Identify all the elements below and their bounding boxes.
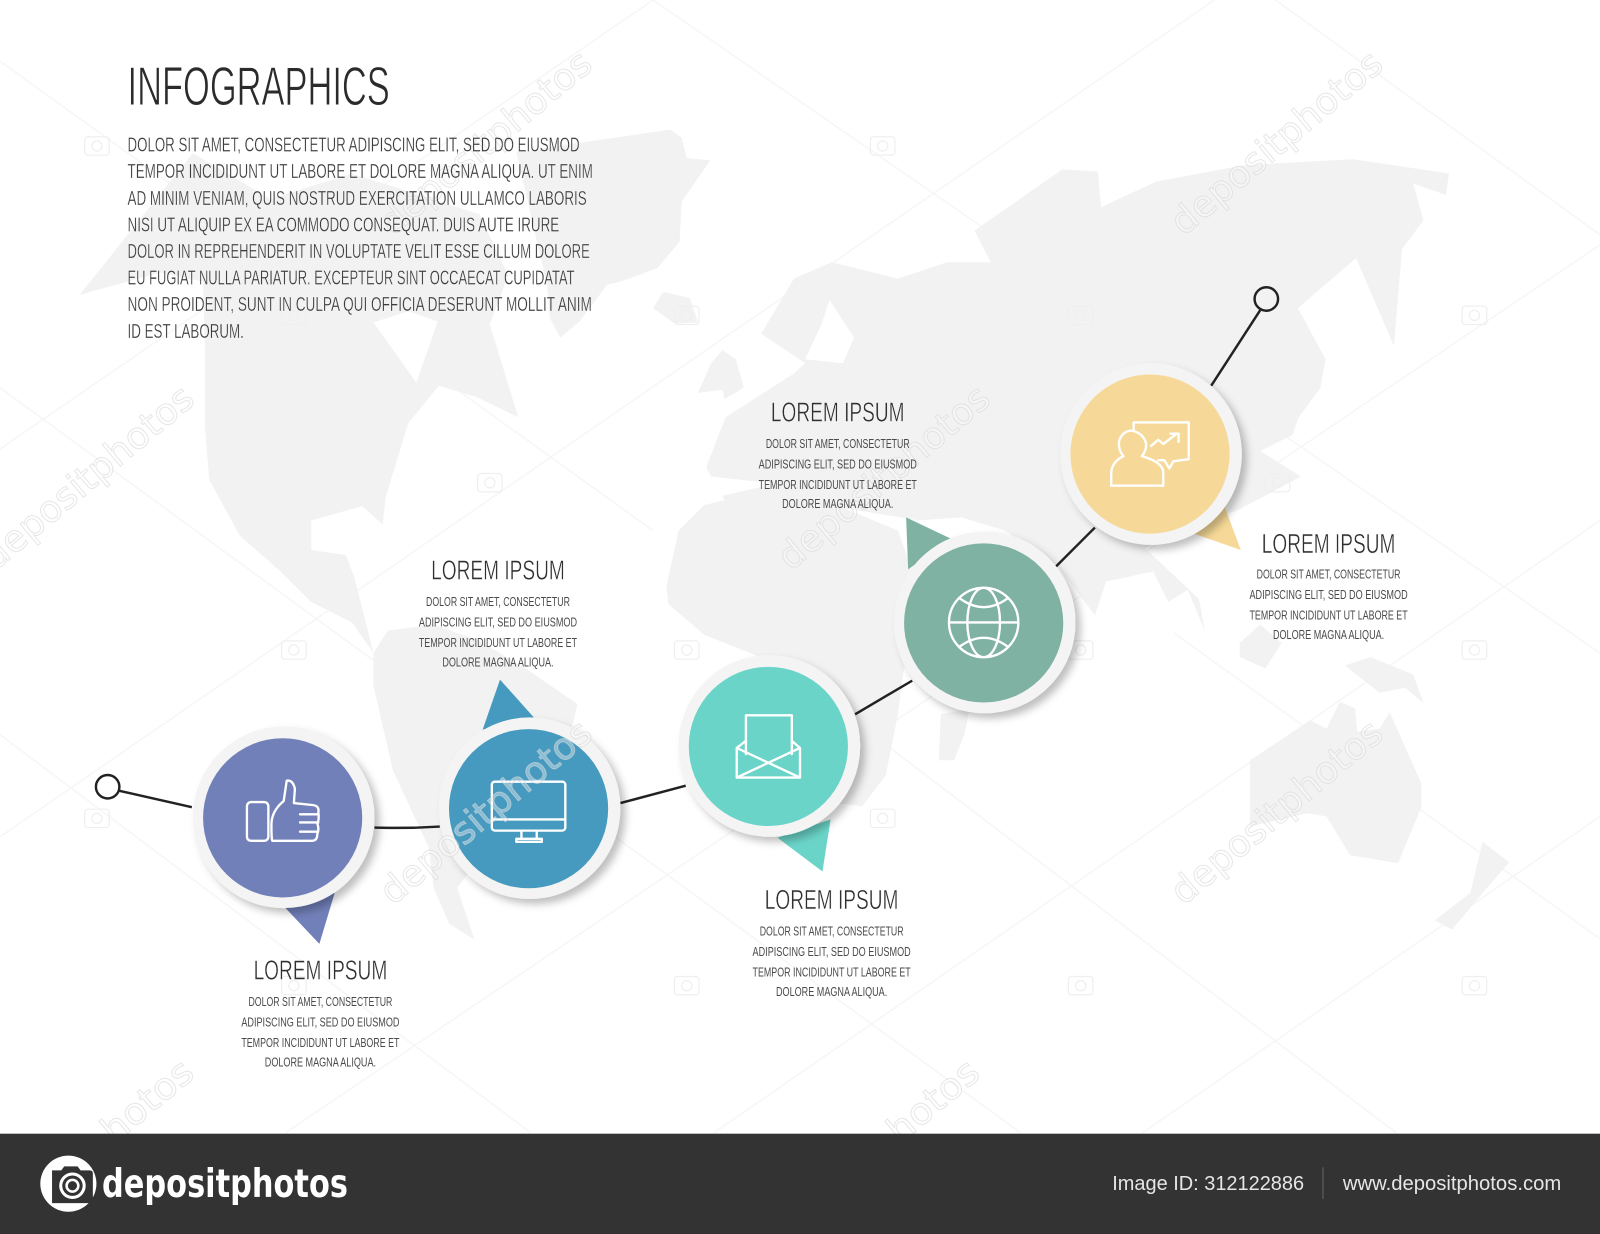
step 1 marker	[193, 727, 374, 944]
watermark texts: hotos	[92, 1050, 202, 1152]
step 2 text: TEMPOR INCIDIDUNT UT LABORE ET	[419, 635, 577, 650]
step 1 text: LOREM IPSUM	[254, 955, 387, 986]
map: australia	[1250, 702, 1421, 863]
map: indonesia	[1240, 624, 1282, 668]
step 1 text: DOLOR SIT AMET, CONSECTETUR	[248, 994, 392, 1009]
step 2 text	[419, 555, 577, 669]
icon: camera logo	[40, 1156, 96, 1212]
map: north america	[80, 153, 518, 653]
watermark cameras	[85, 137, 1487, 995]
step 3 text	[753, 884, 911, 999]
icon: open envelope	[737, 715, 800, 778]
step 5 text	[1249, 528, 1408, 642]
title: INFOGRAPHICS	[128, 55, 390, 117]
step 4 text: ADIPISCING ELIT, SED DO EIUSMOD	[759, 456, 917, 471]
intro text block: ID EST LABORUM.	[128, 321, 244, 343]
step 5 text: LOREM IPSUM	[1262, 528, 1395, 559]
map: baltic cutout	[805, 300, 854, 363]
intro text block	[128, 135, 593, 343]
icon: monitor	[492, 782, 565, 842]
step 4 text	[759, 396, 917, 511]
icon: thumbs up	[247, 781, 319, 841]
watermark texts: depositphotos	[1162, 41, 1391, 244]
step 4 text: DOLORE MAGNA ALIQUA.	[782, 496, 893, 511]
step 4 text: LOREM IPSUM	[771, 396, 905, 427]
step 1 text: DOLORE MAGNA ALIQUA.	[265, 1054, 376, 1069]
intro text block: AD MINIM VENIAM, QUIS NOSTRUD EXERCITATION ULLAMCO LABORIS	[128, 188, 587, 210]
intro text block: EU FUGIAT NULLA PARIATUR. EXCEPTEUR SINT OCCAECAT CUPIDATAT	[128, 268, 574, 290]
icon: globe	[949, 588, 1018, 657]
logo wordmark: depositphotos	[102, 1162, 348, 1207]
step 1 text: TEMPOR INCIDIDUNT UT LABORE ET	[241, 1035, 400, 1050]
map: greenland	[516, 130, 710, 338]
step 3 text: DOLOR SIT AMET, CONSECTETUR	[760, 924, 904, 939]
step 3 text: TEMPOR INCIDIDUNT UT LABORE ET	[753, 965, 911, 980]
step 3 text: LOREM IPSUM	[765, 884, 898, 915]
step 4 text: DOLOR SIT AMET, CONSECTETUR	[766, 436, 910, 451]
footer bar	[0, 1134, 1600, 1234]
intro text block: NISI UT ALIQUIP EX EA COMMODO CONSEQUAT. DUIS AUTE IRURE	[128, 214, 559, 236]
intro text block: DOLOR SIT AMET, CONSECTETUR ADIPISCING ELIT, SED DO EIUSMOD	[128, 135, 580, 157]
step 3 text: ADIPISCING ELIT, SED DO EIUSMOD	[753, 944, 911, 959]
map: iceland	[653, 292, 698, 323]
step 5 text: DOLORE MAGNA ALIQUA.	[1273, 627, 1384, 642]
watermark texts: depositphotos	[1162, 711, 1391, 913]
step 4 text: TEMPOR INCIDIDUNT UT LABORE ET	[759, 477, 917, 492]
website url: www.depositphotos.com	[1342, 1173, 1561, 1195]
step 1 text: ADIPISCING ELIT, SED DO EIUSMOD	[241, 1015, 399, 1030]
step 4 marker	[894, 517, 1076, 713]
world map	[80, 130, 1509, 940]
watermark over circle: depositphotos	[371, 711, 600, 913]
intro text block: NON PROIDENT, SUNT IN CULPA QUI OFFICIA DESERUNT MOLLIT ANIM	[128, 294, 592, 316]
step 2 text: ADIPISCING ELIT, SED DO EIUSMOD	[419, 615, 577, 630]
step 5 text: ADIPISCING ELIT, SED DO EIUSMOD	[1249, 587, 1408, 602]
map: hudson bay cutout	[373, 311, 438, 383]
watermark texts	[0, 41, 1391, 1152]
watermark texts: depositphotos	[769, 376, 998, 578]
intro text block: TEMPOR INCIDIDUNT UT LABORE ET DOLORE MAGNA ALIQUA. UT ENIM	[128, 161, 593, 183]
map: mediterranean notch	[702, 476, 776, 500]
intro text block: DOLOR IN REPREHENDERIT IN VOLUPTATE VELIT ESSE CILLUM DOLORE	[128, 241, 590, 263]
step 2 marker	[439, 680, 620, 899]
icon: presenter with chart	[1111, 422, 1189, 486]
step 1 text	[241, 955, 400, 1069]
step 5 text: TEMPOR INCIDIDUNT UT LABORE ET	[1249, 607, 1408, 622]
map: eurasia	[706, 159, 1449, 632]
map: new zealand	[1435, 842, 1509, 930]
map: new guinea	[1345, 657, 1423, 703]
watermark texts: hotos	[878, 1050, 988, 1152]
step 3 text: DOLORE MAGNA ALIQUA.	[776, 984, 887, 999]
map: british isles	[698, 350, 744, 399]
step 2 text: LOREM IPSUM	[431, 555, 565, 586]
image id: Image ID: 312122886	[1112, 1173, 1304, 1195]
step 5 text: DOLOR SIT AMET, CONSECTETUR	[1257, 567, 1401, 582]
step 2 text: DOLOR SIT AMET, CONSECTETUR	[426, 594, 570, 609]
step 2 text: DOLORE MAGNA ALIQUA.	[442, 654, 554, 669]
watermark texts: depositphotos	[371, 41, 600, 244]
timeline connector	[96, 287, 1278, 828]
step 3 marker	[679, 655, 860, 871]
map: africa	[666, 492, 923, 806]
map: south america	[373, 624, 578, 940]
step 5 marker	[1060, 363, 1242, 550]
map: madagascar	[939, 709, 969, 760]
